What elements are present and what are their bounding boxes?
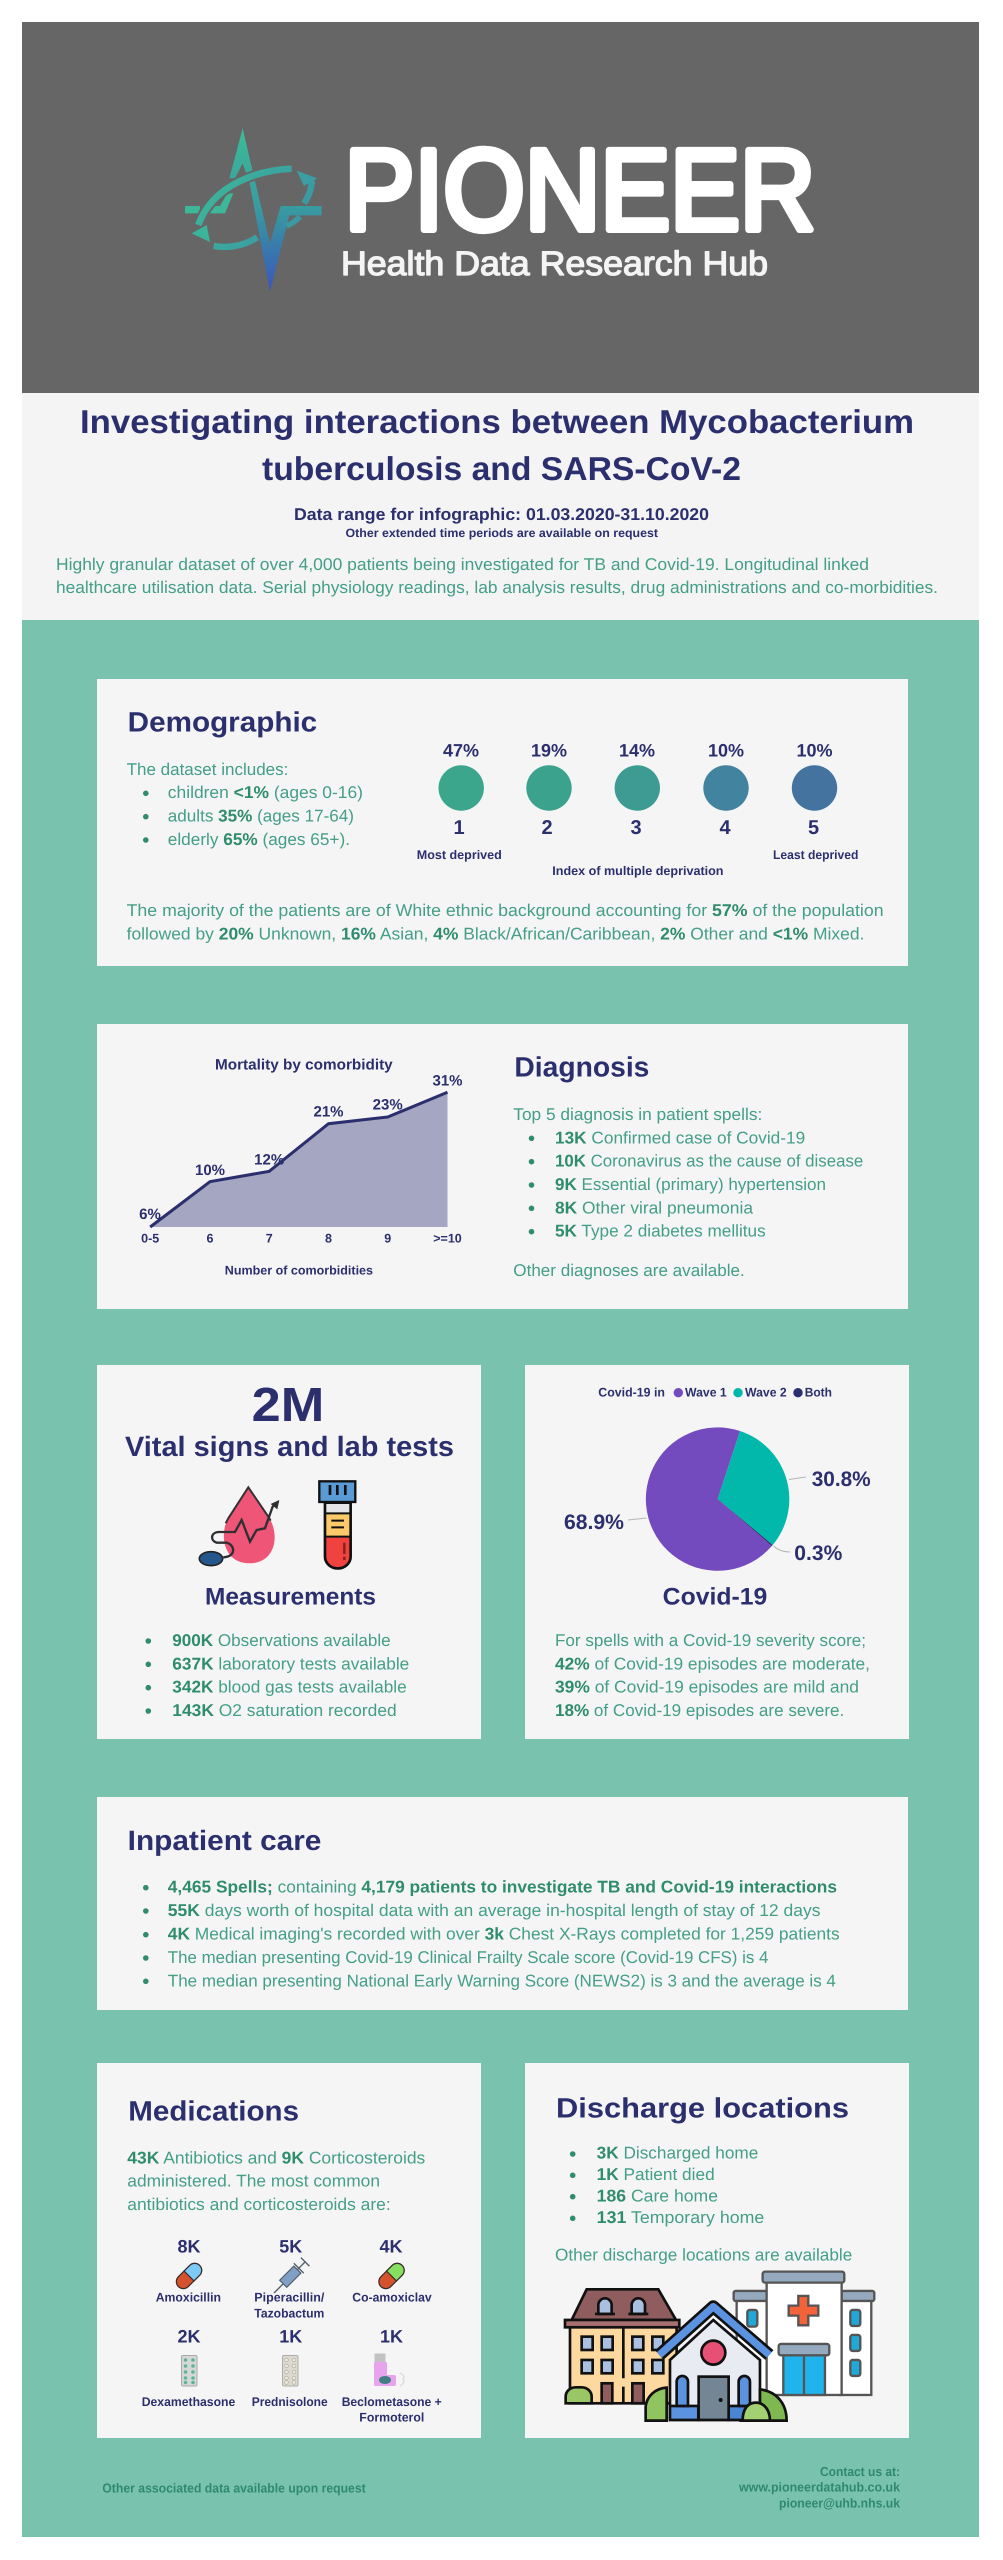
heading: diagnosis: Diagnosis [514, 1052, 649, 1083]
ethnicity text [127, 901, 884, 943]
area chart: mortality by comorbidity: >=10 [433, 1232, 462, 1246]
medication: beclometasone + formoterol: 1K [380, 2326, 403, 2346]
area chart: mortality by comorbidity [139, 1056, 463, 1277]
pie chart: 68.9% [564, 1511, 624, 1534]
medication: beclometasone + formoterol: Beclometasone + [342, 2395, 442, 2409]
icon: hospital [734, 2272, 874, 2395]
measurements list: 143K O2 saturation recorded [172, 1701, 397, 1720]
area chart: mortality by comorbidity: 6 [207, 1232, 214, 1246]
deprivation index chart: 47% [443, 741, 479, 761]
deprivation index chart: 5 [808, 817, 819, 839]
pie chart [564, 1427, 871, 1571]
inpatient list: 4K Medical imaging's recorded with over 3k Chest X-Rays completed for 1,259 patients [168, 1925, 840, 1944]
measurements list: 342K blood gas tests available [172, 1678, 407, 1697]
subheading: measurements: Measurements [205, 1583, 376, 1610]
deprivation index chart: Index of multiple deprivation [552, 864, 724, 878]
diagnosis list: 8K Other viral pneumonia [555, 1198, 754, 1217]
severity text: 42% of Covid-19 episodes are moderate, [555, 1654, 870, 1673]
area chart: mortality by comorbidity: 0-5 [141, 1232, 159, 1246]
subheading: covid-19: Covid-19 [663, 1583, 767, 1610]
contact details: www.pioneerdatahub.co.uk [738, 2480, 901, 2495]
contact details: pioneer@uhb.nhs.uk [779, 2496, 901, 2511]
logo wordmark: PIONEER [344, 126, 816, 254]
diagnosis list [513, 1105, 863, 1280]
inpatient list: The median presenting National Early Warning Score (NEWS2) is 3 and the average is 4 [168, 1971, 836, 1990]
medications intro [127, 2148, 425, 2214]
intro text: Highly granular dataset of over 4,000 patients being investigated for TB and Covid-19. Longitudinal linked [56, 555, 869, 574]
measurements list: 900K Observations available [172, 1631, 391, 1650]
medication: piperacillin/tazobactum [254, 2237, 325, 2321]
icon: PIONEER logo mark [185, 128, 322, 292]
severity text: 39% of Covid-19 episodes are mild and [555, 1678, 859, 1697]
subheading: vital signs: Vital signs and lab tests [125, 1431, 454, 1462]
medication: piperacillin/tazobactum: Piperacillin/ [254, 2291, 325, 2305]
area chart: mortality by comorbidity: 31% [432, 1073, 463, 1090]
heading: demographic: Demographic [128, 707, 317, 738]
medication: co-amoxiclav [352, 2237, 432, 2305]
pie legend [598, 1386, 832, 1400]
medication: piperacillin/tazobactum: 5K [279, 2237, 302, 2257]
area chart: mortality by comorbidity: 21% [313, 1103, 344, 1120]
deprivation index chart: 10% [708, 741, 744, 761]
deprivation index chart [417, 741, 858, 878]
time period note: Other extended time periods are available on request [346, 526, 658, 540]
deprivation index chart: 3 [630, 817, 642, 839]
medication: amoxicillin: 8K [177, 2237, 201, 2257]
discharge list [555, 2143, 852, 2264]
age breakdown list: elderly 65% (ages 65+). [168, 830, 350, 849]
area chart: mortality by comorbidity: 12% [254, 1151, 284, 1168]
severity text [555, 1631, 870, 1720]
heading: medications: Medications [128, 2096, 299, 2127]
heading: inpatient care: Inpatient care [128, 1825, 321, 1856]
title [80, 403, 914, 487]
medications intro: administered. The most common [127, 2172, 380, 2191]
diagnosis list: Other diagnoses are available. [513, 1261, 745, 1280]
measurements list [146, 1631, 409, 1720]
big number: 2M [252, 1379, 324, 1432]
age breakdown list [127, 760, 363, 849]
deprivation index chart: 1 [453, 817, 465, 839]
ethnicity text: The majority of the patients are of White ethnic background accounting for 57% of the population [127, 901, 884, 920]
medication: dexamethasone [142, 2326, 235, 2409]
pie legend: Both [805, 1386, 832, 1400]
icon: blood drop with pressure bulb [199, 1487, 279, 1566]
area chart: mortality by comorbidity: 6% [139, 1206, 161, 1223]
medication: co-amoxiclav: 4K [379, 2237, 403, 2257]
pie legend: Covid-19 in [598, 1386, 665, 1400]
green background [22, 620, 979, 2537]
discharge list: 1K Patient died [597, 2165, 715, 2184]
medication: beclometasone + formoterol [342, 2326, 442, 2425]
logo subtitle: Health Data Research Hub [341, 245, 768, 283]
panel: inpatient care [97, 1797, 908, 2010]
contact details [738, 2464, 901, 2511]
header banner [22, 22, 979, 393]
medication: co-amoxiclav: Co-amoxiclav [352, 2291, 432, 2305]
age breakdown list: adults 35% (ages 17-64) [168, 807, 354, 826]
discharge list: 3K Discharged home [597, 2143, 758, 2162]
intro text: healthcare utilisation data. Serial physiology readings, lab analysis results, drug administrations and co-morbidities. [56, 578, 938, 597]
intro text [56, 555, 938, 597]
pie legend: Wave 1 [685, 1386, 727, 1400]
medication: amoxicillin [156, 2237, 221, 2305]
discharge list: Other discharge locations are available [555, 2245, 852, 2264]
medication: dexamethasone: Dexamethasone [142, 2395, 235, 2409]
diagnosis list: Top 5 diagnosis in patient spells: [513, 1105, 762, 1124]
panel: demographic [97, 679, 908, 966]
deprivation index chart: 10% [796, 741, 833, 761]
discharge list: 186 Care home [597, 2187, 718, 2206]
icon: test tube [319, 1481, 355, 1568]
inpatient list: 55K days worth of hospital data with an average in-hospital length of stay of 12 days [168, 1901, 821, 1920]
diagnosis list: 5K Type 2 diabetes mellitus [555, 1222, 766, 1241]
data range: Data range for infographic: 01.03.2020-31.10.2020 [294, 505, 709, 524]
area chart: mortality by comorbidity: 7 [266, 1232, 273, 1246]
deprivation index chart: 2 [541, 817, 553, 839]
panel: measurements [97, 1365, 481, 1739]
medication: piperacillin/tazobactum: Tazobactum [254, 2307, 324, 2321]
area chart: mortality by comorbidity: 9 [384, 1232, 391, 1246]
title: Investigating interactions between Mycobacterium [80, 403, 914, 440]
panel: medications [97, 2063, 481, 2438]
icon: house [646, 2307, 787, 2421]
panel: diagnosis [97, 1024, 908, 1309]
area chart: mortality by comorbidity: Mortality by comorbidity [215, 1056, 393, 1073]
inpatient list: 4,465 Spells; containing 4,179 patients to investigate TB and Covid-19 interactions [168, 1878, 837, 1897]
measurements list: 637K laboratory tests available [172, 1654, 409, 1673]
diagnosis list: 13K Confirmed case of Covid-19 [555, 1128, 805, 1147]
inpatient list: The median presenting Covid-19 Clinical Frailty Scale score (Covid-19 CFS) is 4 [168, 1948, 768, 1967]
footer note: Other associated data available upon request [102, 2481, 366, 2496]
area chart: mortality by comorbidity: 10% [195, 1162, 225, 1179]
area chart: mortality by comorbidity: 8 [325, 1232, 332, 1246]
pie chart: 30.8% [812, 1468, 871, 1491]
panel: discharge locations [525, 2063, 909, 2438]
title: tuberculosis and SARS-CoV-2 [262, 450, 741, 487]
age breakdown list: The dataset includes: [127, 760, 288, 779]
panel: covid-19 [525, 1365, 909, 1739]
medication: prednisolone [252, 2326, 328, 2409]
medications intro: antibiotics and corticosteroids are: [127, 2195, 391, 2214]
diagnosis list: 10K Coronavirus as the cause of disease [555, 1152, 863, 1171]
medication: dexamethasone: 2K [177, 2326, 201, 2346]
age breakdown list: children <1% (ages 0-16) [168, 783, 363, 802]
deprivation index chart: 4 [719, 817, 731, 839]
inpatient list [143, 1878, 840, 1990]
area chart: mortality by comorbidity: Number of comorbidities [225, 1263, 373, 1277]
medication: beclometasone + formoterol: Formoterol [359, 2411, 424, 2425]
medications intro: 43K Antibiotics and 9K Corticosteroids [127, 2148, 425, 2167]
discharge list: 131 Temporary home [597, 2208, 764, 2227]
deprivation index chart: Least deprived [773, 848, 858, 862]
title panel [22, 393, 979, 620]
diagnosis list: 9K Essential (primary) hypertension [555, 1175, 826, 1194]
pie chart: 0.3% [794, 1542, 843, 1565]
ethnicity text: followed by 20% Unknown, 16% Asian, 4% Black/African/Caribbean, 2% Other and <1% Mixed. [127, 924, 864, 943]
deprivation index chart: 14% [619, 741, 655, 761]
severity text: 18% of Covid-19 episodes are severe. [555, 1701, 844, 1720]
medication: amoxicillin: Amoxicillin [156, 2291, 221, 2305]
icon: apartment building [565, 2289, 679, 2403]
severity text: For spells with a Covid-19 severity score; [555, 1631, 866, 1650]
medication: prednisolone: Prednisolone [252, 2395, 328, 2409]
deprivation index chart: 19% [531, 741, 567, 761]
medication: prednisolone: 1K [279, 2326, 302, 2346]
contact details: Contact us at: [820, 2464, 900, 2479]
area chart: mortality by comorbidity: 23% [373, 1097, 403, 1114]
deprivation index chart: Most deprived [417, 848, 502, 862]
pie legend: Wave 2 [745, 1386, 787, 1400]
heading: discharge locations: Discharge locations [556, 2093, 849, 2124]
